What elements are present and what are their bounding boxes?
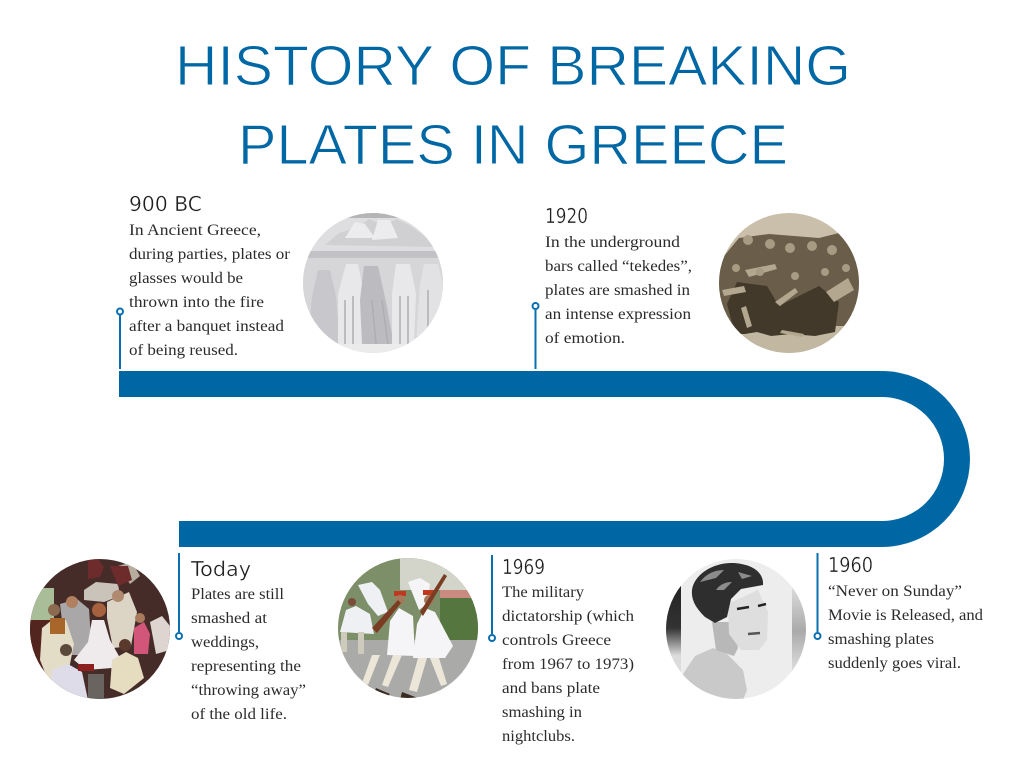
text: Today description: “throwing away” [191,682,306,699]
text: 1920 description: plates are smashed in [545,282,690,299]
timeline serpentine bar [119,371,970,547]
text: Today description [191,586,306,723]
text: 900 BC description: thrown into the fire [129,294,264,311]
text: 1969 description: controls Greece [502,632,611,649]
text: 1969 description: The military [502,584,584,601]
heading: 1920: 1920 [545,204,588,228]
text: 900 BC description: during parties, plates or [129,246,291,263]
heading: 1969: 1969 [502,555,545,579]
image: woman portrait [666,559,806,700]
title: HISTORY OF BREAKING [175,34,851,98]
image: musicians photograph [719,213,859,353]
text: 1969 description [502,584,634,745]
text: 1920 description: an intense expression [545,306,691,323]
title [175,34,851,177]
text: 1969 description: from 1967 to 1973) [502,656,634,673]
panel: 1920 [532,204,859,369]
connector: 1920 [532,303,538,369]
image: marble frieze [303,213,443,354]
text: 900 BC description [129,222,291,359]
heading: Today: Today [190,557,251,581]
text: 1960 description: “Never on Sunday” [828,583,962,600]
text: Today description: of the old life. [191,706,287,723]
panel: Today [30,553,306,723]
text: 1969 description: smashing in [502,704,582,721]
text: 1960 description [828,583,983,672]
text: 1969 description: nightclubs. [502,728,575,745]
text: 900 BC description: after a banquet instead [129,318,284,335]
text: Today description: weddings, [191,634,259,651]
panel: 1969 [338,555,634,745]
text: 1920 description: bars called “tekedes”, [545,258,692,275]
text: Today description: smashed at [191,610,268,627]
heading: 1960: 1960 [828,553,873,577]
text: 900 BC description: glasses would be [129,270,243,287]
panel: 900 BC [117,192,443,369]
heading: 900 BC: 900 BC [129,192,202,216]
panel: 1960 [666,553,983,700]
text: 1960 description: Movie is Released, and [828,607,983,624]
connector: Today [176,553,182,639]
title: PLATES IN GREECE [238,113,788,177]
text: 1920 description: of emotion. [545,330,625,347]
text: Today description: representing the [191,658,301,675]
image: marching guards [338,558,478,702]
connector: 1960 [814,553,820,639]
text: 1920 description [545,234,692,347]
text: 1960 description: suddenly goes viral. [828,655,961,672]
connector: 1969 [489,555,495,641]
text: 900 BC description: of being reused. [129,342,238,359]
text: Today description: Plates are still [191,586,284,603]
text: 1960 description: smashing plates [828,631,934,648]
connector: 900 BC [117,308,123,369]
text: 900 BC description: In Ancient Greece, [129,222,261,239]
text: 1969 description: dictatorship (which [502,608,634,625]
text: 1920 description: In the underground [545,234,680,251]
image: wedding ceremony [30,559,170,700]
text: 1969 description: and bans plate [502,680,600,697]
